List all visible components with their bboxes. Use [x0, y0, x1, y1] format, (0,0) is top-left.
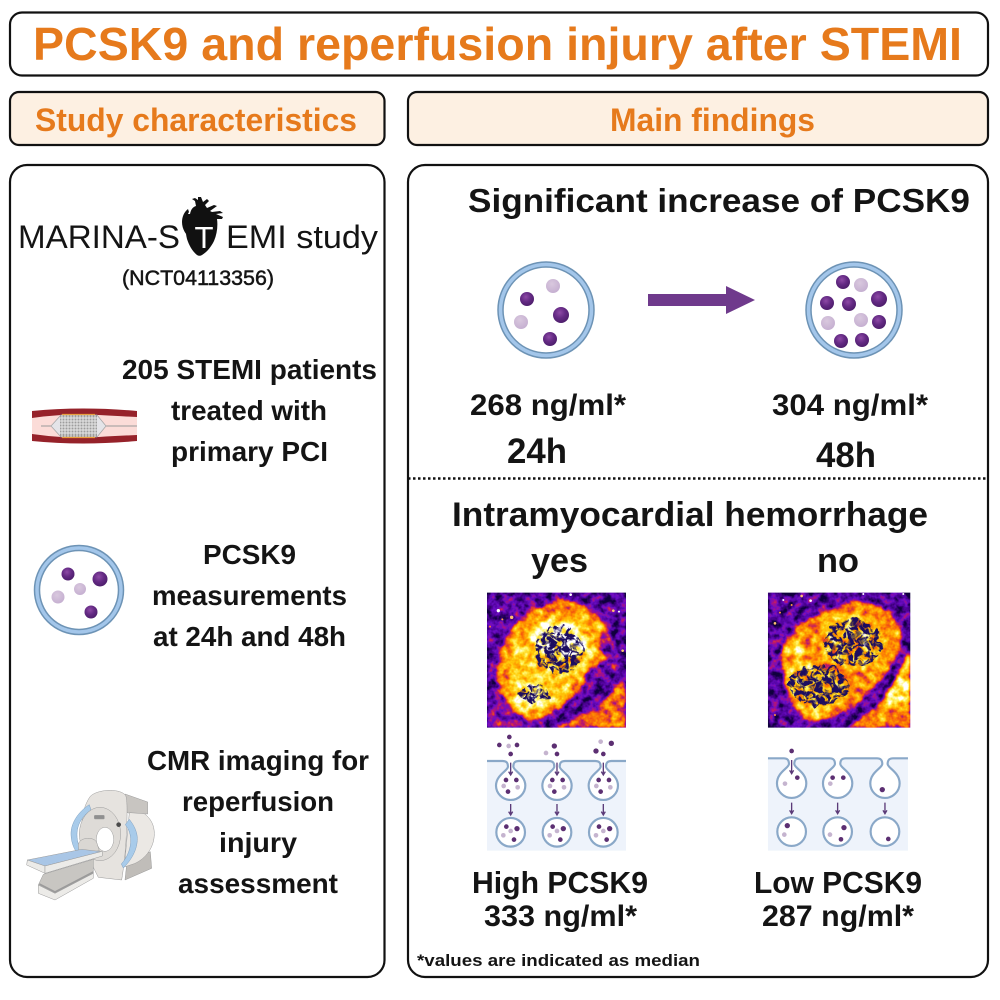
result: high PCSK9: 333 ng/ml* — [484, 900, 637, 933]
text: CMR imaging: CMR imaging for — [147, 745, 369, 776]
text: measurements — [152, 539, 347, 652]
icon: blood vessel with PCSK9 particles — [34, 546, 124, 634]
text: CMR imaging: reperfusion — [182, 786, 334, 817]
text: CMR imaging: assessment — [178, 868, 338, 899]
value: 24h: 24h — [507, 432, 567, 471]
icon: MRI scanner — [27, 790, 154, 900]
text: patients: 205 STEMI patients — [122, 354, 377, 385]
study name: MARINA-S — [18, 219, 180, 255]
study name: EMI study — [226, 219, 379, 255]
value: 48h — [772, 389, 928, 475]
text: measurements: PCSK9 — [203, 539, 296, 570]
title: PCSK9 and reperfusion injury after STEMI — [33, 18, 962, 70]
arrow: increase — [648, 286, 755, 314]
value: 24h: 268 ng/ml* — [470, 389, 626, 422]
text: measurements: at 24h and 48h — [153, 621, 346, 652]
heading: main findings: Main findings — [610, 102, 815, 138]
result: high PCSK9: High PCSK9 — [472, 865, 648, 900]
text: patients — [122, 354, 377, 467]
heading: main findings — [408, 92, 988, 145]
result: high PCSK9 — [472, 865, 648, 933]
diagram: high PCSK9 endocytosis — [487, 735, 626, 851]
text: CMR imaging — [147, 745, 369, 899]
panel: main findings — [408, 165, 988, 977]
text: measurements: measurements — [152, 580, 347, 611]
text: patients: treated with — [171, 395, 327, 426]
value: 24h — [470, 389, 626, 471]
trial identifier: (NCT04113356) — [122, 266, 274, 290]
result: low PCSK9 — [754, 865, 922, 933]
heading: intramyocardial hemorrhage: Intramyocardial hemorrhage — [452, 496, 928, 534]
icon: stent in artery — [32, 408, 137, 444]
result: low PCSK9: 287 ng/ml* — [762, 900, 914, 933]
icon: heart with letter T — [182, 197, 223, 256]
CMR image: no hemorrhage — [768, 593, 910, 730]
value: 48h: 304 ng/ml* — [772, 389, 928, 422]
text: CMR imaging: injury — [219, 827, 297, 858]
heading: study characteristics: Study characteristics — [35, 102, 357, 138]
diagram: low PCSK9 endocytosis — [768, 749, 908, 851]
text: patients: primary PCI — [171, 436, 328, 467]
heading: significant increase: Significant increase of PCSK9 — [468, 182, 970, 219]
icon: vessel at 48h — [806, 262, 902, 358]
result: low PCSK9: Low PCSK9 — [754, 865, 922, 900]
footnote: *values are indicated as median — [417, 952, 700, 970]
CMR image: with hemorrhage — [487, 593, 626, 729]
icon: heart with letter T: T — [194, 220, 214, 255]
panel: study characteristics — [10, 165, 384, 977]
icon: vessel at 24h — [498, 262, 594, 358]
heading: study characteristics — [10, 92, 384, 145]
label: no: no — [817, 542, 859, 580]
label: yes: yes — [531, 542, 588, 580]
study name — [18, 219, 379, 255]
value: 48h: 48h — [816, 436, 876, 475]
